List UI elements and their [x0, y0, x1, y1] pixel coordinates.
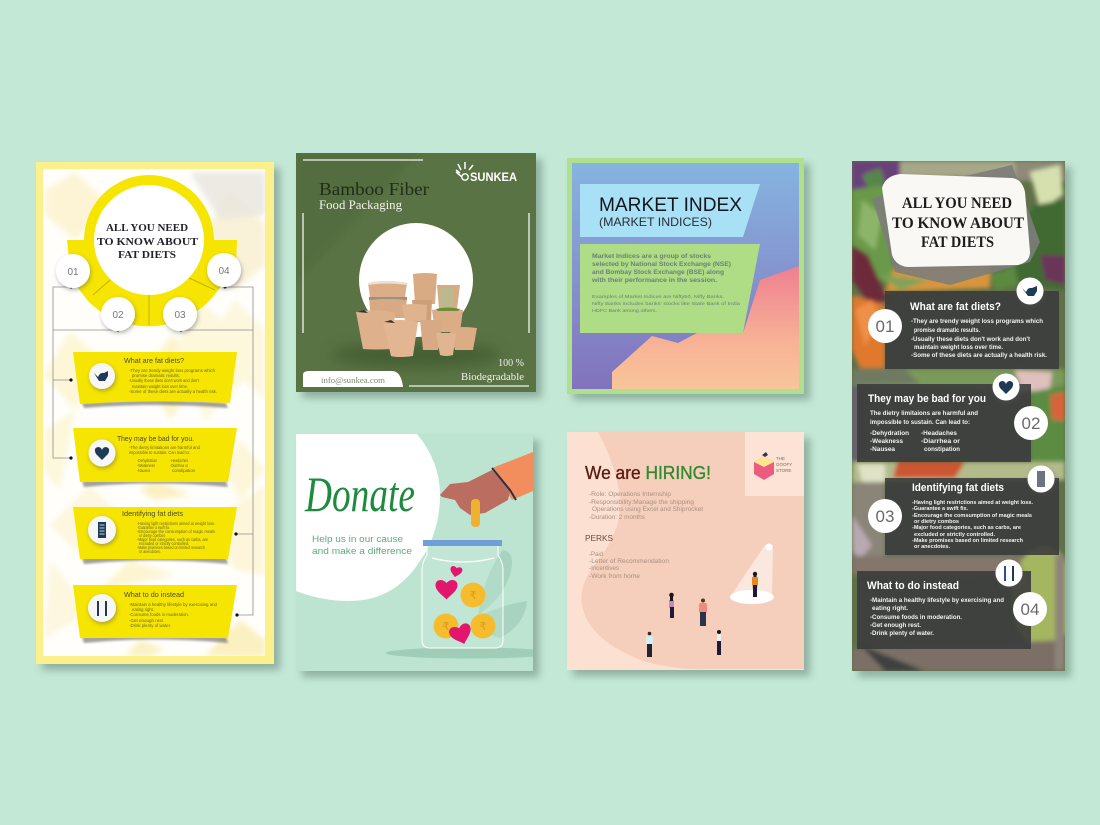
- dark panel 02: [857, 384, 1031, 462]
- emblem title: [97, 222, 199, 261]
- vegetable photo background: [852, 161, 1076, 671]
- gear emblem: [67, 175, 237, 326]
- card: what are fat diets: maintain weight loss over time.: [132, 384, 188, 389]
- card: identifying fat diets: excluded or strictly controlled.: [139, 541, 189, 546]
- title card: TO KNOW ABOUT: [892, 215, 1025, 232]
- panel: photo fat diets infographic: [852, 161, 1076, 677]
- dark panel 01: promise dramatic results.: [914, 327, 980, 334]
- logo: sunkea: [456, 162, 517, 184]
- dark panel 03: -Encourage the comsumption of magic meals: [912, 513, 1033, 519]
- logo: goofy store: GOOFY: [776, 462, 792, 467]
- dark panel 03: -Having light restrictions aimed at weight loss.: [912, 500, 1033, 506]
- description panel: [580, 244, 760, 333]
- panel: bamboo fiber food packaging: [296, 153, 542, 398]
- dark panel 02: -Weakness: [870, 438, 903, 445]
- card: identifying fat diets: Identifying fat diets: [122, 509, 183, 518]
- card: identifying fat diets: -Guarantee a swift fix.: [137, 525, 170, 530]
- title card: ALL YOU NEED: [902, 195, 1012, 212]
- number badges: [56, 253, 241, 331]
- number circles: 01: [876, 317, 894, 336]
- dark panel 02: impossible to sustain. Can lead to:: [870, 419, 970, 426]
- perks: -Letter of Recommendation: [589, 558, 669, 565]
- area chart: [612, 266, 799, 389]
- panel: donate: [296, 434, 554, 677]
- card: what to do instead: -Maintain a healthy lifestyle by exercising and: [129, 602, 218, 607]
- jar: ₹: [480, 621, 486, 633]
- dark panel 03: Identifying fat diets: [912, 482, 1004, 494]
- card: what to do instead: -Drink plenty of water.: [129, 623, 171, 628]
- dark panel 03: -Guarantee a swift fix.: [912, 506, 968, 512]
- card: they may be bad for you: -Headaches: [170, 458, 188, 463]
- claim: biodegradable: Biodegradable: [461, 371, 524, 383]
- dark panel 02: constipation: [924, 446, 960, 453]
- dark panel 04: -Get enough rest.: [870, 622, 921, 629]
- description panel: Nifty Banks includes banks' stocks like State Bank of India: [592, 301, 741, 306]
- card: they may be bad for you: -Weakness: [137, 463, 155, 468]
- card: what to do instead: What to do instead: [124, 590, 184, 599]
- role details: -Role: Operations Internship: [589, 491, 671, 498]
- dark panel 03: -Make promises based on limited research: [912, 538, 1023, 544]
- dark panel 04: -Consume foods in moderation.: [870, 614, 962, 621]
- dark panel 01: -They are trendy weight loss programs which: [911, 318, 1043, 325]
- hearts: [436, 580, 458, 599]
- title card backing: [872, 165, 1040, 285]
- headline: Food Packaging: [319, 197, 402, 212]
- logo: goofy store: [754, 452, 792, 480]
- card: what to do instead: eating right.: [132, 607, 154, 612]
- darker blob: [581, 432, 804, 669]
- contact pill: info@sunkea.com: [321, 376, 386, 385]
- number circles: 03: [876, 507, 894, 526]
- dark panel 01: maintain weight loss over time.: [914, 344, 1003, 351]
- perks: [585, 534, 669, 580]
- dark panel 03: -Major food categories, such as carbs, are: [912, 525, 1022, 531]
- dark panel 04: What to do instead: [867, 580, 959, 592]
- logo: goofy store: STORE: [776, 468, 791, 473]
- donate script: Donate: [304, 466, 415, 522]
- people: [646, 572, 758, 657]
- card: they may be bad for you: -Diarrhea or: [170, 463, 188, 468]
- card: they may be bad for you: They may be bad for you.: [117, 434, 194, 443]
- number badges: 02: [112, 310, 124, 321]
- connector dots: [69, 285, 239, 617]
- logo panel: [745, 432, 804, 496]
- card: identifying fat diets: or anecdotes.: [139, 549, 161, 554]
- card: they may be bad for you: constipation: [172, 468, 196, 473]
- donate subtitle: and make a difference: [312, 546, 412, 557]
- card: they may be bad for you: -The dietry limitations are harmful and: [129, 445, 201, 450]
- number circles: 02: [1022, 414, 1040, 433]
- dark panel 04: -Drink plenty of water.: [870, 630, 934, 637]
- coins: [460, 582, 486, 608]
- dark panel 02: They may be bad for you: [868, 393, 986, 405]
- connector lines: [53, 287, 253, 615]
- claim: biodegradable: [461, 358, 524, 383]
- dark panel 03: or dietry combos: [914, 519, 960, 525]
- hand with coin: [440, 452, 533, 527]
- card: what are fat diets: -They are trendy weight loss programs which: [129, 368, 216, 373]
- card: identifying fat diets: -Having light restrictions aimed at weight loss.: [137, 521, 215, 526]
- dark panel 02: -Diarrhea or: [921, 438, 960, 445]
- description panel: HDFC Bank among others.: [592, 308, 657, 313]
- number badges: 03: [174, 310, 186, 321]
- dark panel 02: The dietry limitaions are harmful and: [870, 410, 978, 417]
- title banner: (MARKET INDICES): [599, 215, 712, 229]
- title banner: [580, 184, 760, 237]
- dark panel 02: -Headaches: [921, 430, 957, 437]
- dark panel 04: [857, 571, 1031, 649]
- card: identifying fat diets: [73, 507, 237, 564]
- logo: sunkea: SUNKEA: [470, 170, 517, 184]
- white blob: [296, 434, 440, 601]
- description panel: Market Indices are a group of stocks: [592, 253, 712, 260]
- number circles: 04: [1021, 600, 1039, 619]
- leaves: [476, 550, 527, 638]
- card: identifying fat diets: or dietry combos: [139, 533, 165, 538]
- headline: Bamboo Fiber: [319, 179, 429, 199]
- panel: yellow fat diets infographic: [36, 162, 280, 670]
- card: what to do instead: [73, 585, 237, 643]
- description panel: with their performance in the session.: [591, 277, 717, 284]
- card: they may be bad for you: impossible to sustain. Can lead to:: [129, 450, 190, 455]
- dark panel 01: [885, 291, 1059, 369]
- panel: we are hiring: [567, 432, 810, 676]
- title banner: MARKET INDEX: [599, 195, 742, 216]
- perks: -Incentives: [589, 565, 620, 572]
- card: what to do instead: -Get enough rest.: [129, 618, 164, 623]
- card: what are fat diets: [73, 352, 237, 408]
- role details: Operations using Excel and Shiprocket: [592, 506, 703, 513]
- donate subtitle: Help us in our cause: [312, 534, 403, 545]
- perks: -Paid: [589, 551, 603, 558]
- contact pill: [303, 371, 403, 387]
- dark panel 03: [885, 478, 1059, 555]
- emblem title: TO KNOW ABOUT: [97, 236, 199, 248]
- spotlight: [730, 544, 774, 604]
- card: they may be bad for you: [73, 428, 237, 487]
- dark panel 04: -Maintain a healthy lifestyle by exercising and: [870, 597, 1004, 604]
- description panel: and Bombay Stock Exchange (BSE) along: [592, 269, 724, 276]
- dark panel 01: -Usually these diets don't work and don't: [911, 336, 1031, 343]
- card: they may be bad for you: -Dehydration: [137, 458, 157, 463]
- title card: FAT DIETS: [921, 234, 994, 251]
- kraft food containers: [356, 273, 477, 357]
- perks: PERKS: [585, 534, 613, 543]
- donate subtitle: [312, 534, 412, 557]
- card: identifying fat diets: -Make promises based on limited research: [137, 545, 206, 550]
- icon circles: [992, 278, 1054, 586]
- card: what are fat diets: -Usually these diets don't work and don't: [129, 378, 200, 383]
- photo circle: [359, 223, 473, 337]
- jar: ₹: [470, 590, 476, 602]
- emblem title: FAT DIETS: [118, 249, 176, 261]
- title card: [882, 174, 1030, 267]
- role details: -Responsibility:Manage the shipping: [589, 499, 694, 506]
- role details: -Duration: 2 months: [589, 514, 646, 521]
- frame lines: [303, 160, 529, 386]
- panel: market index: [567, 158, 810, 400]
- card: what are fat diets: -Some of these diets are actually a health risk.: [129, 389, 217, 394]
- dark panel 01: -Some of these diets are actually a health risk.: [911, 352, 1047, 359]
- number badges: 01: [67, 267, 79, 278]
- dark panel 04: eating right.: [872, 605, 908, 612]
- jar: [422, 540, 503, 648]
- role details: [589, 491, 703, 521]
- card: identifying fat diets: -Major food categories, such as carbs, are: [137, 537, 209, 542]
- dark panel 01: What are fat diets?: [910, 301, 1001, 313]
- card: what are fat diets: What are fat diets?: [124, 356, 184, 365]
- logo: goofy store: THE: [776, 456, 785, 461]
- number badges: 04: [218, 266, 230, 277]
- card: what to do instead: -Consume foods in moderation.: [129, 612, 189, 617]
- description panel: selected by National Stock Exchange (NSE): [592, 261, 731, 268]
- dark panel 03: excluded or strictly controlled.: [914, 532, 995, 538]
- card: they may be bad for you: -Nausea: [137, 468, 150, 473]
- card: what are fat diets: promise dramatic results.: [132, 373, 180, 378]
- card: identifying fat diets: -Encourage the consumption of magic meals: [137, 529, 215, 534]
- hiring heading: We are HIRING!: [585, 462, 711, 483]
- emblem title: ALL YOU NEED: [106, 222, 188, 234]
- perks: -Work from home: [589, 573, 640, 580]
- description panel: Examples of Market Indices are Nifty50, Nifty Banks.: [592, 294, 724, 299]
- jar: ₹: [442, 621, 450, 633]
- number circles: [868, 309, 1048, 626]
- dark panel 02: -Dehydration: [870, 430, 909, 437]
- dark panel 03: or anecdotes.: [914, 544, 950, 550]
- claim: biodegradable: 100 %: [498, 358, 524, 369]
- jar shadow: [386, 648, 533, 658]
- dark panel 02: -Nausea: [870, 446, 895, 453]
- headline: [319, 179, 429, 212]
